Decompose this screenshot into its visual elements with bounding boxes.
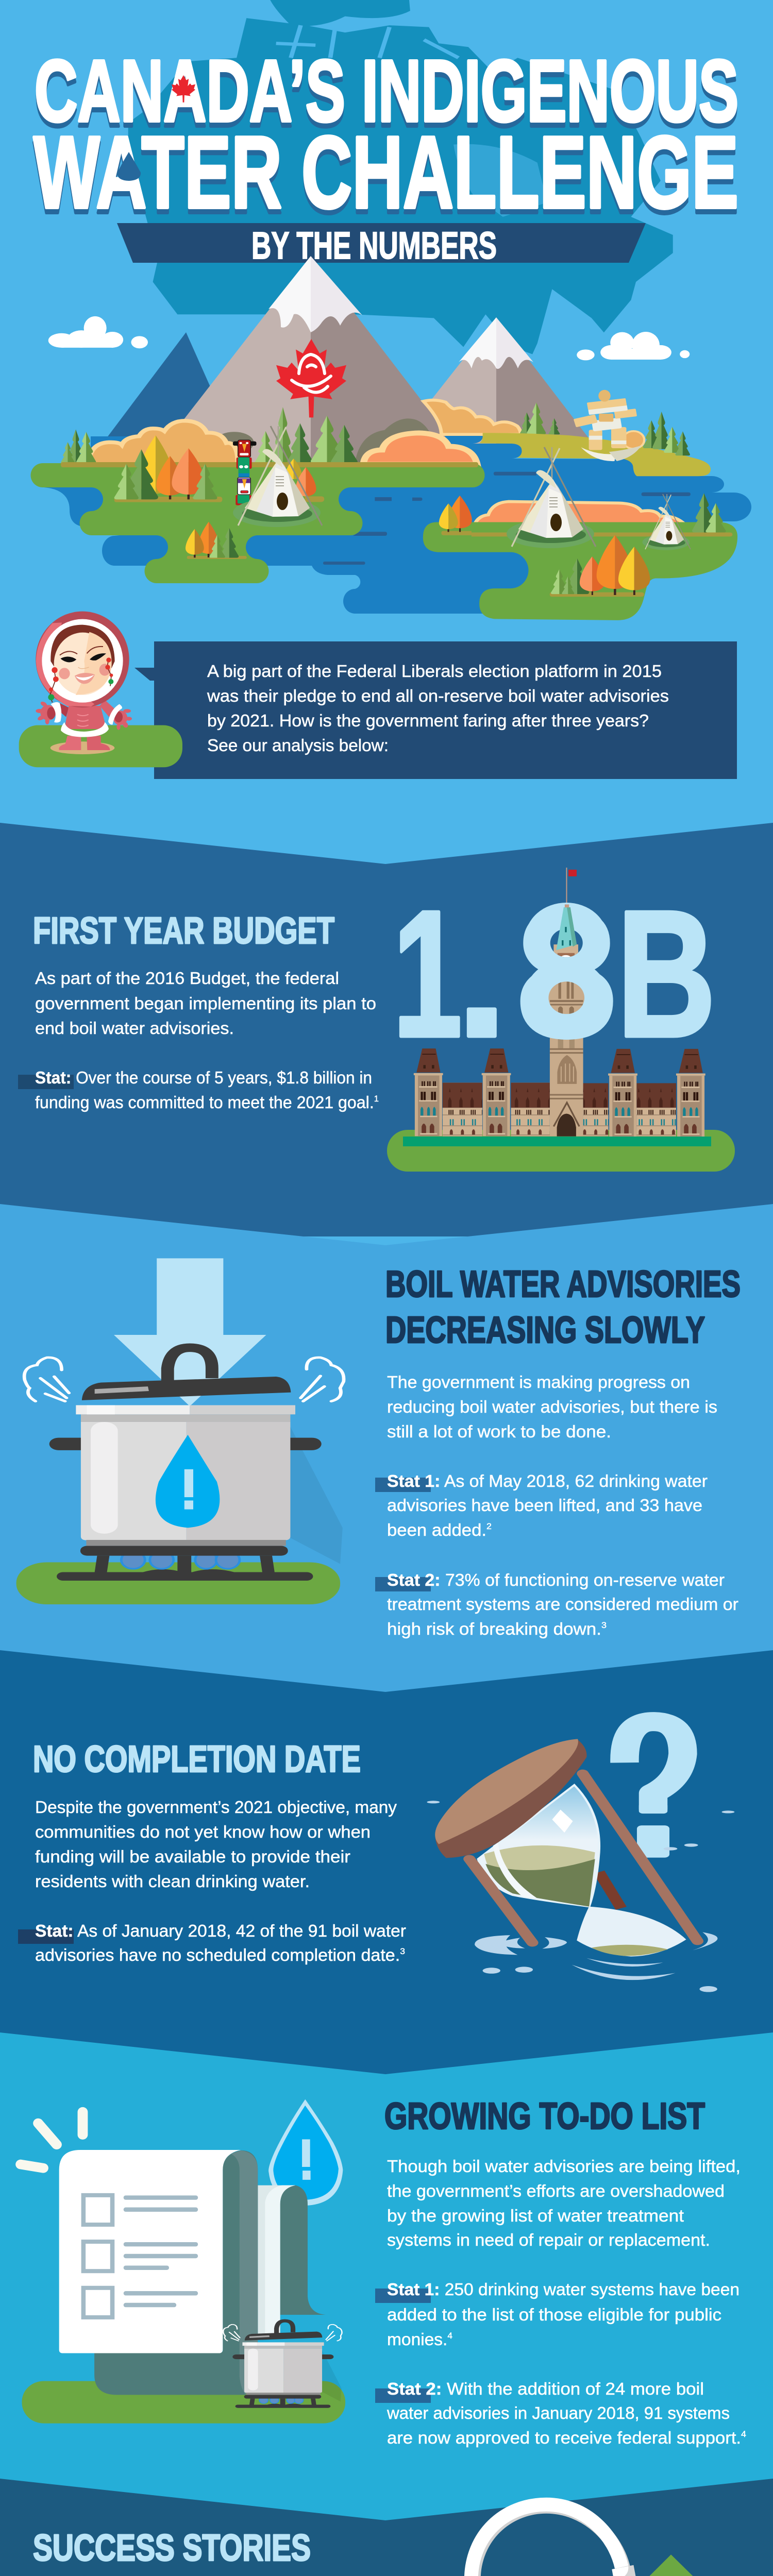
grass	[22, 2381, 345, 2424]
stat 1: added to the list of those eligible for public	[387, 2305, 721, 2324]
faucet neck	[471, 2504, 624, 2576]
region: right landscape	[412, 390, 737, 620]
lake ripples	[412, 472, 691, 501]
towers	[414, 1048, 443, 1136]
check mark	[491, 2554, 697, 2576]
central tower	[550, 1037, 583, 1137]
body text: funding will be available to provide their	[35, 1847, 350, 1866]
body text: The government is making progress on	[387, 1372, 690, 1392]
intro text: was their pledge to end all on-reserve boil water advisories	[207, 686, 669, 705]
orange bush	[89, 421, 238, 464]
icon: maple leaf in title	[172, 75, 195, 103]
stat 2	[375, 1570, 738, 1638]
grass	[16, 1562, 340, 1604]
intro text: by 2021. How is the government faring after three years?	[207, 711, 649, 730]
stat: Stat: As of January 2018, 42 of the 91 boil water	[35, 1921, 406, 1940]
stat 2: high risk of breaking down.	[387, 1619, 590, 1638]
big number: 8	[516, 873, 617, 1075]
mountain: left blue peak	[107, 332, 227, 438]
body text: systems in need of repair or replacement.	[387, 2230, 710, 2249]
intro text: A big part of the Federal Liberals election platform in 2015	[207, 662, 662, 681]
background map of Canada	[128, 0, 673, 354]
stat 2: treatment systems are considered medium or	[387, 1595, 738, 1614]
green strip	[403, 1137, 711, 1146]
stat 1: been added.	[387, 1520, 482, 1539]
region: left landscape	[61, 407, 358, 464]
lake ripples	[323, 497, 392, 565]
autumn trees on right land	[439, 493, 726, 595]
list lines	[124, 2195, 198, 2307]
stat 2: Stat 2: 73% of functioning on-reserve water	[387, 1570, 725, 1589]
inukshuk	[574, 390, 690, 461]
ripples	[427, 1801, 734, 1992]
stat 1: Stat 1: 250 drinking water systems have been	[387, 2280, 740, 2299]
panel: growing to-do list	[0, 2032, 773, 2524]
heading: FIRST YEAR BUDGET	[33, 910, 334, 952]
stat: 3	[400, 1946, 405, 1956]
pines in front	[114, 449, 217, 499]
heading	[385, 1264, 741, 1351]
hero: title and landscape	[30, 0, 751, 620]
tower seen through the 8	[529, 903, 602, 1040]
body text: Though boil water advisories are being lifted,	[387, 2157, 741, 2176]
heading: SUCCESS STORIES	[33, 2528, 311, 2569]
down arrow	[114, 1258, 266, 1406]
glass	[478, 1785, 686, 1957]
stat: 1	[374, 1094, 379, 1104]
scroll	[59, 2150, 326, 2395]
grass	[19, 725, 182, 767]
body text: Despite the government’s 2021 objective, many	[35, 1798, 397, 1817]
intro text: See our analysis below:	[207, 736, 389, 755]
tipi: centre right	[507, 447, 596, 548]
main land	[30, 463, 484, 583]
stat 2: Stat 2: With the addition of 24 more boil	[387, 2379, 704, 2398]
body text: residents with clean drinking water.	[35, 1872, 310, 1891]
tipi: small right	[643, 494, 691, 550]
panel: boil water advisories	[0, 1204, 773, 1700]
salmon bushes	[473, 502, 693, 534]
icon: red maple leaf on mountain	[276, 339, 346, 417]
nozzle	[612, 2565, 637, 2576]
pine trees left	[61, 429, 96, 463]
heading: NO COMPLETION DATE	[33, 1739, 361, 1780]
autumn trees	[137, 435, 205, 499]
small pines on olive land	[520, 402, 560, 434]
orange bush behind olive land	[424, 400, 520, 434]
panel: first year budget	[0, 823, 773, 1236]
body text: end boil water advisories.	[35, 1019, 234, 1038]
flag	[566, 868, 577, 909]
stat: funding was committed to meet the 2021 goal.	[35, 1093, 383, 1112]
big number: B	[617, 873, 716, 1075]
olive land	[479, 433, 711, 476]
warning drop	[268, 2099, 343, 2206]
lake	[237, 429, 751, 614]
ground	[387, 1130, 735, 1172]
stat: Stat: Over the course of 5 years, $1.8 billion in	[35, 1068, 372, 1087]
body text: communities do not yet know how or when	[35, 1822, 371, 1841]
back legs	[599, 1872, 621, 1908]
trees behind tipi	[285, 459, 316, 496]
dirt patches	[114, 496, 324, 559]
big number: .	[456, 873, 508, 1075]
body text	[35, 969, 376, 1038]
braids	[50, 660, 111, 702]
body text: the government’s efforts are overshadowed	[387, 2181, 725, 2200]
water drop warning	[156, 1435, 220, 1528]
stat 1	[375, 1471, 708, 1539]
checkboxes	[83, 2195, 112, 2317]
question mark	[625, 1722, 683, 1858]
stat 2: water advisories in January 2018, 91 systems	[386, 2403, 730, 2422]
region: left land details	[114, 435, 392, 565]
stat 2: 4	[741, 2429, 746, 2439]
stat 1: advisories have been lifted, and 33 have	[387, 1496, 702, 1515]
stat 1: 2	[486, 1521, 492, 1531]
stat 1	[375, 2280, 740, 2349]
stat: advisories have no scheduled completion date.	[35, 1945, 389, 1964]
stat	[18, 1921, 406, 1964]
face	[54, 633, 112, 695]
tipi: left	[233, 426, 322, 527]
subtitle banner: BY THE NUMBERS	[251, 224, 497, 267]
dirt strip	[61, 462, 478, 467]
stat 2: 3	[601, 1620, 607, 1630]
lower right land	[423, 522, 737, 620]
body text: As part of the 2016 Budget, the federal	[35, 969, 339, 988]
body text	[387, 2157, 741, 2249]
panel: success stories	[0, 2479, 773, 2576]
stat	[18, 1068, 379, 1112]
icon: water drop in title	[117, 152, 141, 181]
stat 2	[375, 2379, 746, 2447]
salmon bush	[363, 433, 477, 464]
illustration: parliament with 1.8B	[387, 868, 735, 1172]
illustration: woman in parka	[19, 612, 182, 767]
lower trees	[186, 522, 239, 558]
pines behind tipi	[255, 407, 358, 463]
stat 1: 4	[447, 2331, 452, 2341]
body text: still a lot of work to be done.	[387, 1422, 611, 1441]
illustration: checklist scroll with drop and pot	[21, 2099, 345, 2424]
body text	[387, 1372, 717, 1441]
lake left side	[44, 436, 175, 566]
mountain: main peak	[149, 256, 470, 464]
subtitle banner	[117, 223, 646, 267]
intro text	[207, 662, 669, 755]
mountain: right peak	[389, 317, 600, 453]
body text: government began implementing its plan to	[35, 994, 376, 1013]
stat 1: monies.	[387, 2330, 447, 2349]
dirt strips	[441, 531, 732, 597]
panel: intro speech box	[135, 641, 737, 779]
back grey hills	[214, 418, 436, 463]
stat 1: Stat 1: As of May 2018, 62 drinking water	[387, 1471, 708, 1490]
big number: 1	[393, 873, 462, 1075]
body text	[35, 1798, 397, 1891]
pot	[24, 1348, 344, 1581]
small pot	[223, 2321, 342, 2408]
body text: by the growing list of water treatment	[387, 2206, 684, 2225]
top disk	[435, 1739, 587, 1858]
hood	[36, 612, 129, 707]
stat 2: are now approved to receive federal support.	[387, 2428, 725, 2447]
clouds	[48, 316, 690, 360]
totem pole	[233, 440, 256, 505]
illustration: faucet, check mark and glass	[446, 2504, 697, 2576]
panel: no completion date	[0, 1650, 773, 2112]
spark lines	[21, 2112, 82, 2168]
illustration: hourglass and question mark	[427, 1722, 734, 1992]
body text: reducing boil water advisories, but there is	[387, 1397, 717, 1416]
front leg	[469, 1859, 532, 1943]
illustration: boiling pot with arrow	[16, 1258, 344, 1604]
wings	[443, 1082, 676, 1137]
